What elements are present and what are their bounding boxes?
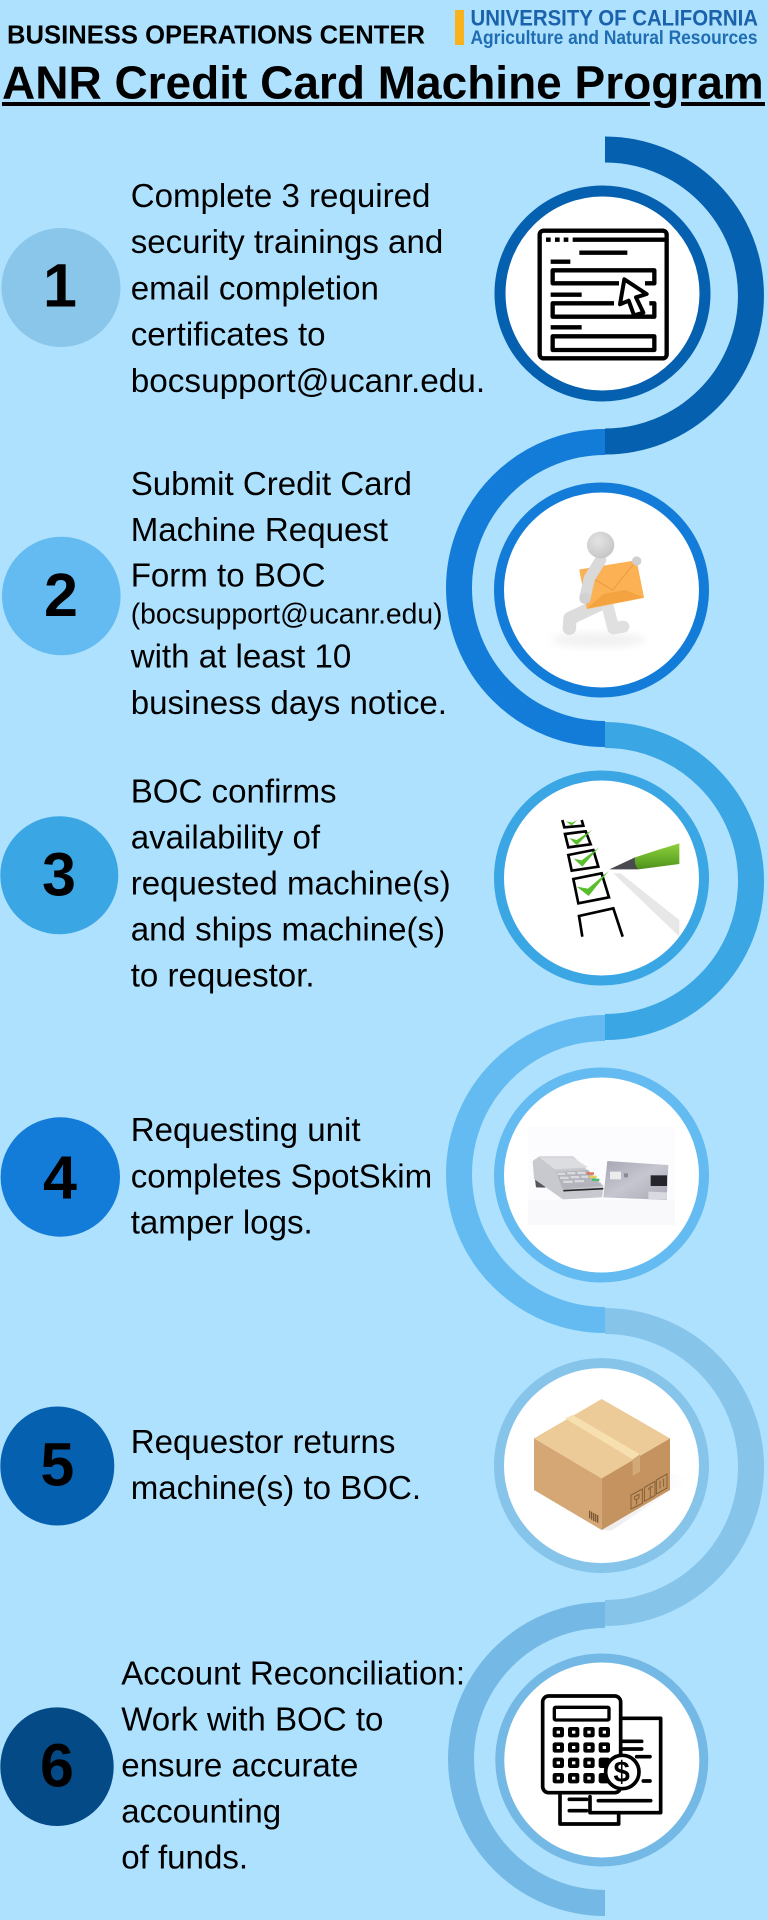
step 1	[2, 150, 751, 442]
step 3 text: BOC confirms	[131, 773, 337, 810]
step 2 text: Submit Credit Card	[131, 466, 412, 503]
title: ANR Credit Card Machine Program	[2, 56, 764, 108]
step 4 text: completes SpotSkim	[131, 1158, 432, 1195]
step 3 connector arc	[605, 735, 751, 1027]
step 6 text: of funds.	[121, 1840, 248, 1877]
step 3 text: to requestor.	[131, 958, 315, 994]
step 1 text: security trainings and	[131, 224, 443, 261]
step 3 number badge: 3	[42, 841, 76, 909]
step 5 number badge: 5	[40, 1431, 74, 1499]
step 6 text: Work with BOC to	[121, 1702, 383, 1739]
step 3 number badge	[0, 816, 118, 934]
step 1 connector arc	[605, 150, 751, 442]
step 1 text: bocsupport@ucanr.edu.	[131, 363, 485, 400]
step 2	[2, 442, 704, 734]
step 2 text: Machine Request	[131, 512, 388, 549]
step 6 text: accounting	[121, 1794, 281, 1831]
step 2 text: Form to BOC	[131, 558, 326, 595]
step 6 text: ensure accurate	[121, 1748, 358, 1785]
step 4	[1, 1028, 704, 1320]
step 2 number badge	[2, 537, 121, 655]
step 4 number badge: 4	[43, 1143, 77, 1211]
step 5 number badge	[0, 1406, 114, 1526]
step 5 connector arc	[605, 1321, 751, 1613]
step 4 text: Requesting unit	[131, 1112, 361, 1149]
step 1 number badge: 1	[43, 252, 77, 320]
step 3 text: and ships machine(s)	[131, 911, 445, 948]
step 6	[0, 1615, 704, 1903]
step 5 text: machine(s) to BOC.	[131, 1470, 421, 1507]
step 6 number badge: 6	[40, 1732, 74, 1800]
step 3 text: requested machine(s)	[131, 865, 451, 902]
step 4 number badge	[1, 1117, 120, 1237]
step 4 text: tamper logs.	[131, 1204, 313, 1241]
step 2 text: with at least 10	[130, 638, 351, 675]
step 1 text: email completion	[131, 270, 379, 308]
step 3	[0, 735, 751, 1027]
step 4 icon: card terminal and credit card	[499, 1072, 704, 1278]
step 2 text: business days notice.	[131, 685, 447, 722]
step 5	[0, 1321, 751, 1613]
step 5 text: Requestor returns	[131, 1424, 395, 1461]
step 2 connector arc	[459, 442, 605, 734]
step 6 icon: calculator and invoice: $	[614, 1756, 630, 1789]
step 6 connector arc	[461, 1615, 605, 1903]
logo: university of california anr	[455, 6, 758, 49]
step 2 icon: figure carrying envelope	[499, 488, 704, 692]
step 4 connector arc	[459, 1028, 605, 1320]
step 3 text: availability of	[131, 819, 321, 856]
step 2 number badge: 2	[44, 561, 78, 629]
step 1 icon: online form with cursor	[500, 191, 705, 396]
header: business operations center: BUSINESS OPERATIONS CENTER	[7, 22, 425, 50]
step 5 icon: cardboard box	[499, 1363, 704, 1568]
step 1 text: Complete 3 required	[131, 178, 430, 215]
step 6 icon: calculator and invoice	[500, 1658, 704, 1862]
step 6 number badge	[0, 1707, 114, 1826]
step 6 text: Account Reconciliation:	[121, 1656, 465, 1693]
step 3 icon: checklist and pen	[499, 776, 704, 980]
step 2 text: (bocsupport@ucanr.edu)	[131, 597, 443, 629]
step 1 text: certificates to	[131, 316, 326, 354]
step 1 number badge	[2, 228, 120, 347]
